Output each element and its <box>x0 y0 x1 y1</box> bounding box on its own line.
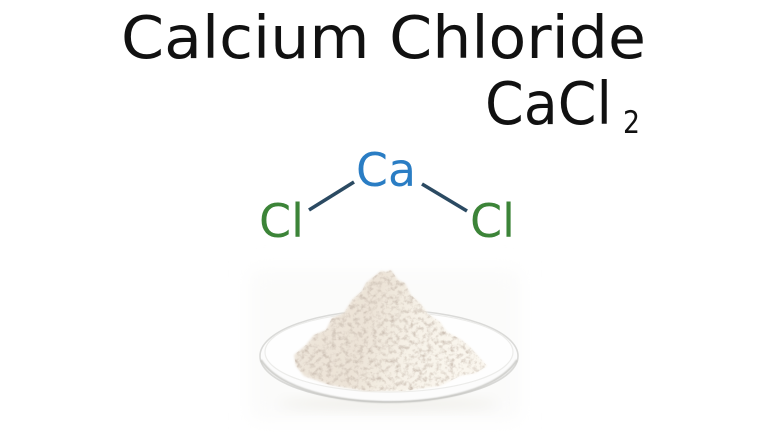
title: Calcium Chloride <box>121 3 646 72</box>
calcium atom label: Ca <box>356 143 416 197</box>
left bond <box>309 182 354 210</box>
left chlorine atom label: Cl <box>259 194 304 248</box>
chemical formula: CaCl <box>485 69 612 138</box>
glass dish <box>260 310 518 402</box>
molecular structure diagram <box>259 143 515 248</box>
soft backdrop shadow <box>250 270 520 420</box>
photo: calcium chloride powder on a glass dish <box>250 270 520 420</box>
right bond <box>422 184 467 211</box>
powder pile <box>294 270 487 391</box>
right chlorine atom label: Cl <box>470 194 515 248</box>
chemical formula: 2 <box>623 105 640 141</box>
